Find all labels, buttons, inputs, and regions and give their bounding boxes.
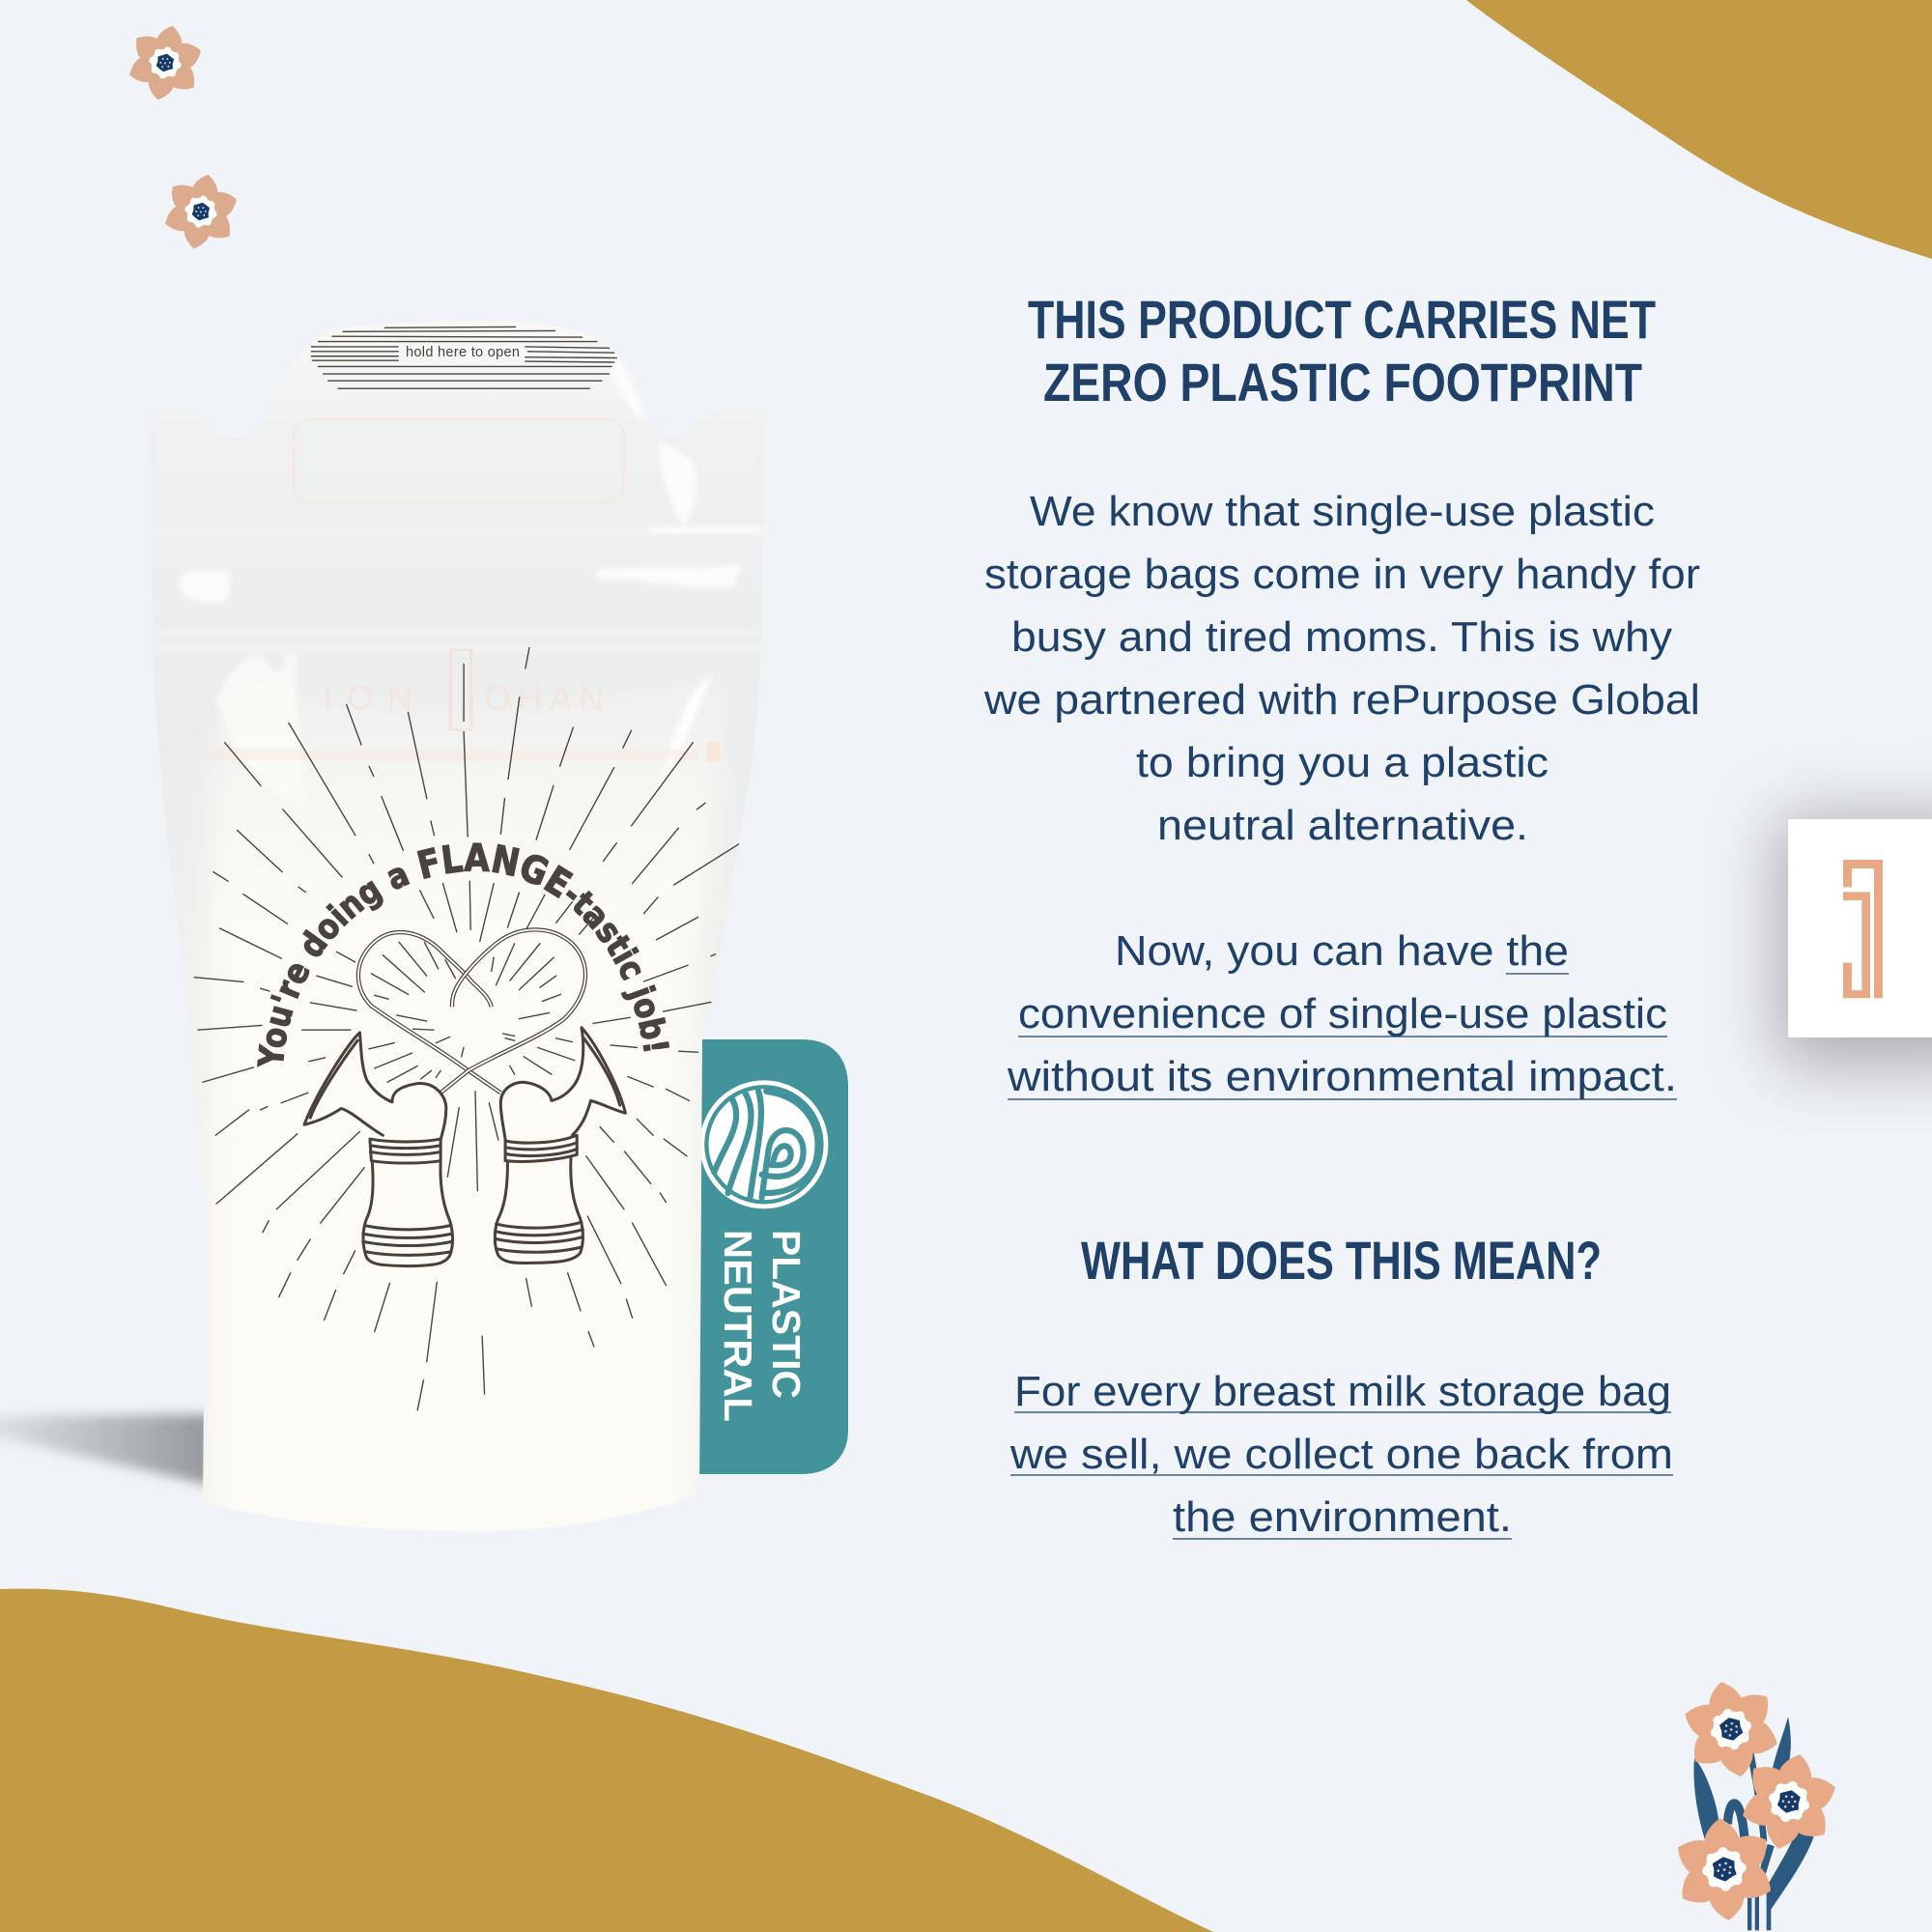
faint pink square mark — [707, 742, 720, 761]
stems and leaves — [1693, 1717, 1814, 1930]
bag body — [150, 322, 765, 1531]
tag logo — [702, 1083, 826, 1207]
faint printed logo and pink marks — [205, 419, 697, 760]
paragraph: convenience: convenience of single-use plastic — [1018, 990, 1667, 1037]
plastic neutral tag — [676, 1039, 848, 1474]
right milk highlight streak — [662, 674, 713, 778]
paragraph: convenience: Now, you can have the — [1115, 927, 1569, 975]
icon: small flower lower — [156, 167, 246, 256]
heading: what does this mean: WHAT DOES THIS MEAN? — [1081, 1230, 1602, 1291]
icon: small flower top — [120, 18, 211, 107]
side tab with logo — [1777, 816, 1932, 1065]
sunburst rays upper — [225, 648, 705, 893]
tag background — [676, 1039, 848, 1474]
left breast pump — [304, 1033, 453, 1266]
hold here tab stripes — [311, 327, 616, 388]
paragraph: single-use plastic: neutral alternative. — [1157, 802, 1528, 849]
heading: net zero plastic footprint: THIS PRODUCT CARRIES NET — [1028, 289, 1656, 350]
paragraph: collect one back — [1009, 1368, 1673, 1541]
faint brand text left: ION — [323, 678, 412, 718]
heading: net zero plastic footprint: ZERO PLASTIC FOOTPRINT — [1043, 352, 1642, 412]
paragraph: convenience — [1007, 927, 1677, 1100]
flower right — [1729, 1744, 1849, 1860]
paragraph: single-use plastic: We know that single-use plastic — [1030, 488, 1655, 535]
seal lines — [153, 533, 763, 649]
icon: brand mark — [1843, 860, 1883, 998]
daffodil bouquet — [1667, 1671, 1849, 1930]
sunburst rays lower — [194, 828, 739, 1410]
paragraph: convenience: without its environmental impact. — [1007, 1053, 1677, 1100]
right breast pump — [495, 1028, 625, 1264]
bottom left gold wave — [0, 1589, 1213, 1932]
paragraph: collect one back: the environment. — [1173, 1493, 1512, 1541]
faint brand text right: OHAN — [484, 678, 604, 718]
heart tube — [358, 929, 585, 1093]
heading: net zero plastic footprint — [1028, 289, 1656, 412]
tab shadow — [1777, 816, 1932, 1065]
tag text: neutral: NEUTRAL — [716, 1230, 760, 1422]
upper left milk bulge — [216, 653, 309, 802]
paragraph: collect one back: For every breast milk storage bag — [1014, 1368, 1671, 1415]
hold here label: hold here to open — [406, 345, 520, 360]
paragraph: single-use plastic — [983, 488, 1700, 849]
tag text: plastic: PLASTIC — [764, 1230, 809, 1399]
bag highlights — [181, 350, 763, 602]
paragraph: single-use plastic: storage bags come in very handy for — [984, 551, 1700, 598]
paragraph: single-use plastic: busy and tired moms. This is why — [1011, 613, 1672, 661]
tab panel — [1788, 819, 1932, 1037]
paragraph: collect one back: we sell, we collect one back from — [1009, 1431, 1673, 1478]
bag ground shadow — [0, 1414, 213, 1486]
right text column — [983, 289, 1700, 1541]
milk storage bag — [151, 327, 765, 1531]
milk fill — [213, 748, 709, 1531]
flower top — [1672, 1671, 1790, 1787]
top right gold wave — [1466, 0, 1932, 259]
paragraph: single-use plastic: to bring you a plastic — [1136, 739, 1548, 786]
flower bottom — [1667, 1813, 1781, 1925]
curved slogan: You're doing a FLANGE-tastic job! — [257, 842, 670, 1067]
paragraph: single-use plastic: we partnered with rePurpose Global — [983, 676, 1700, 724]
